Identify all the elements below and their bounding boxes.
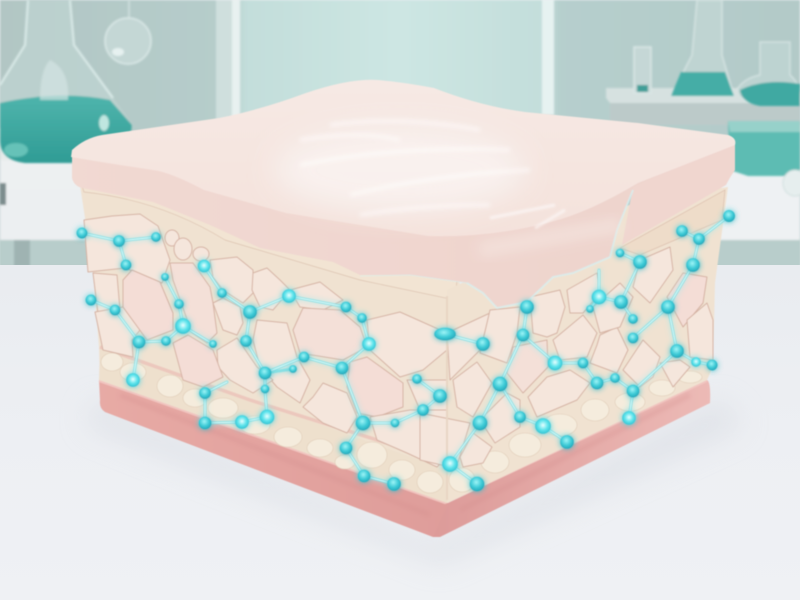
drip highlight [467,190,633,308]
molecular network: bonds [82,216,729,484]
window frame posts [216,0,554,120]
icon: teal glass tray [728,121,800,196]
left lab bench [0,128,130,266]
epidermis slab side [72,140,735,308]
small fat lobules [101,353,443,493]
block shadow on table [85,400,745,565]
large epidermal cells, left [84,214,447,467]
table surface [0,265,800,600]
front corner edge [446,296,448,500]
pink stripe between layers [100,347,447,462]
pink base layer [99,380,710,537]
right wing of slab [622,140,735,245]
epidermis slab top surface [71,80,735,236]
small fat lobules, right [449,371,702,492]
background: laboratory wall [0,0,800,270]
icon: round hanging flask [105,0,151,64]
icon: large conical flask with teal liquid [0,0,133,163]
dermis band, right [620,190,725,255]
dermis cream band, left [80,180,458,300]
wet highlights on skin surface [275,121,565,228]
icon: right lab glassware [634,0,800,106]
skin block [71,80,735,537]
molecular network: right atoms [434,210,735,492]
molecular network: left atoms [76,228,447,491]
large epidermal cells, right [420,247,713,467]
left tissue face [80,180,460,503]
right lab bench [606,88,800,266]
right tissue face [420,187,728,503]
